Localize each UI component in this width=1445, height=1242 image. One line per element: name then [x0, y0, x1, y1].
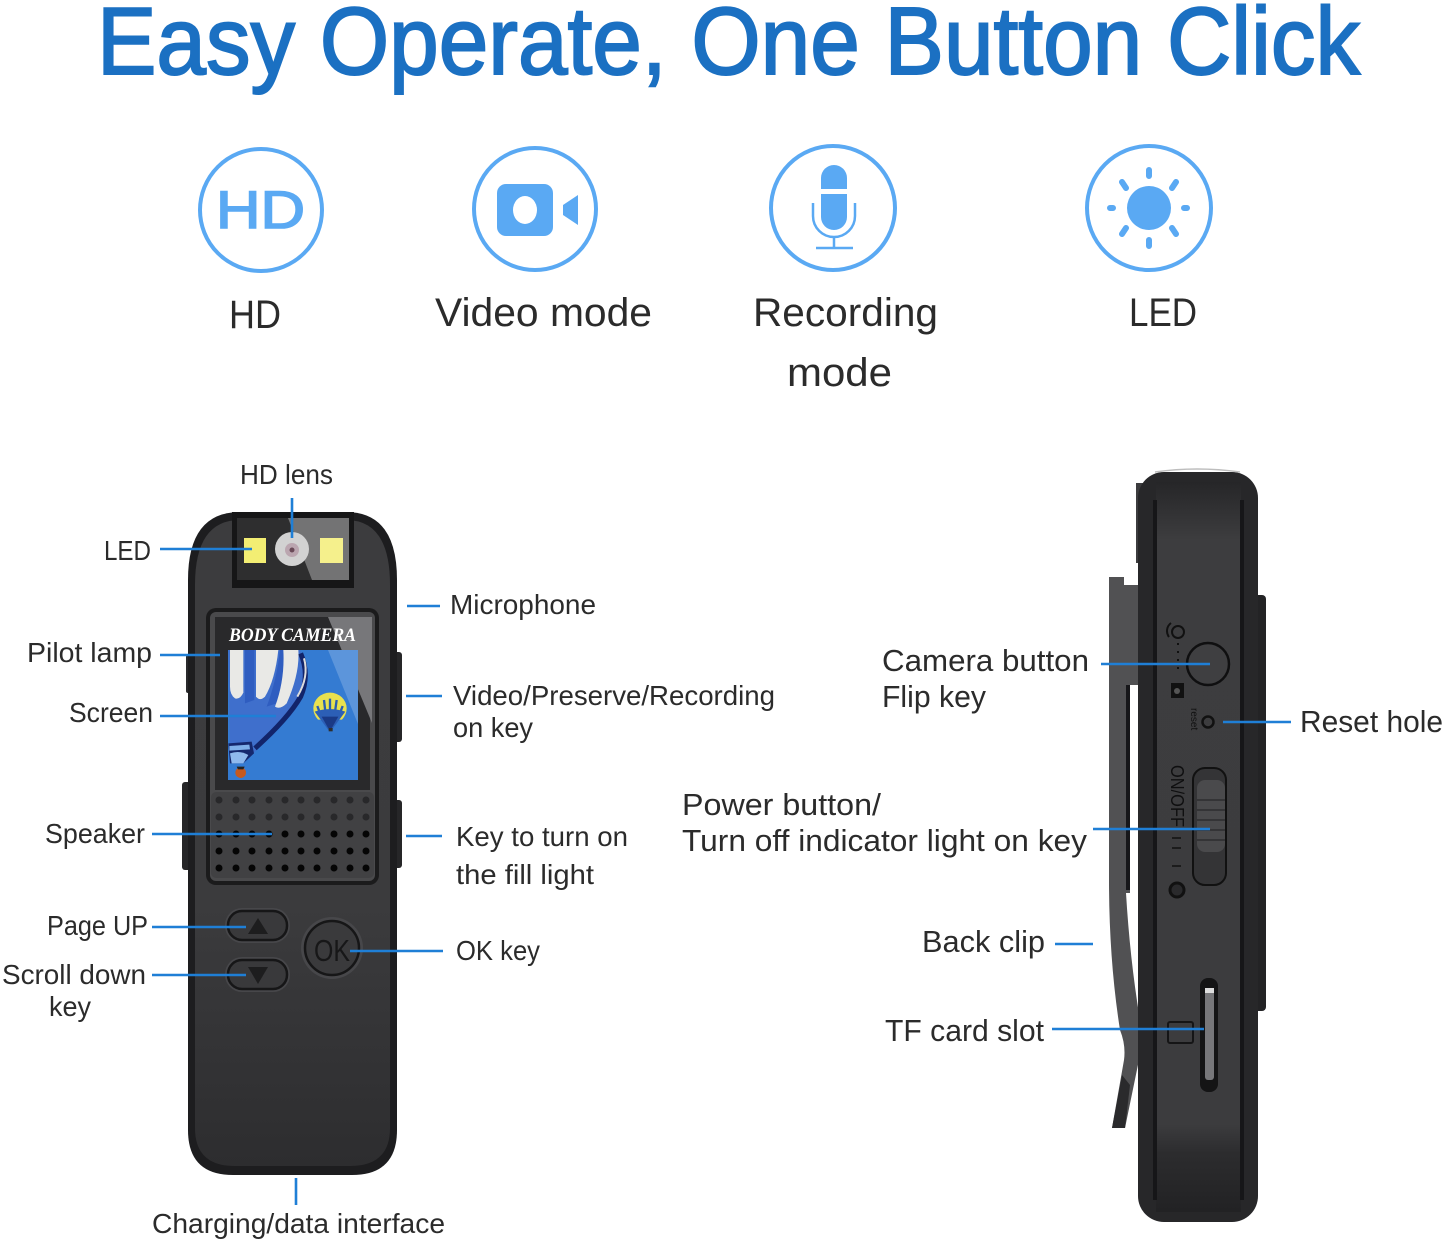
screen bezel: [206, 608, 379, 885]
label: LED: LED: [1129, 291, 1197, 335]
camera button: [1167, 623, 1229, 698]
icon: microphone: [771, 146, 895, 270]
callout: HD lens: [240, 459, 333, 538]
callout: LED: LED: [104, 535, 151, 566]
icon: video camera: [474, 148, 596, 270]
device body: [182, 512, 402, 1175]
side view of camera: [1109, 469, 1266, 1222]
label: recording mode: [753, 291, 938, 395]
label: HD: HD: [229, 293, 281, 337]
icon: sun: [1087, 146, 1211, 270]
label: recording mode: mode: [787, 351, 892, 395]
callout: fill light key: the fill light: [456, 859, 594, 890]
small balloon: [313, 693, 347, 731]
feature: video mode: [435, 148, 652, 335]
callout: scroll down: Scroll down: [2, 959, 146, 990]
callout: HD lens: HD lens: [240, 459, 333, 490]
back clip: [1109, 577, 1140, 1128]
OK button: OK: [314, 933, 350, 968]
callout: camera button: Flip key: [882, 679, 986, 714]
callout: power button: Power button/: [682, 787, 881, 822]
feature: LED: [1087, 146, 1211, 335]
icon: HD: [200, 149, 322, 271]
large balloon: [228, 650, 308, 778]
callout: camera button: [882, 643, 1210, 714]
callout: reset hole: Reset hole: [1300, 704, 1443, 739]
scroll down button: [225, 957, 290, 992]
callout: fill light key: [406, 821, 628, 890]
speaker grille: [211, 792, 374, 878]
callout: power button: [682, 787, 1210, 858]
rear side bar: [1250, 595, 1266, 1011]
label: video mode: Video mode: [435, 291, 652, 335]
side body: [1136, 469, 1258, 1222]
icon: HD: HD: [216, 181, 305, 240]
callout: charging interface: Charging/data interface: [152, 1208, 445, 1239]
reset hole: [1188, 708, 1214, 730]
callout: page up: Page UP: [47, 910, 148, 941]
reset hole: reset: [1188, 708, 1199, 730]
callout: microphone: Microphone: [450, 589, 596, 620]
callout: fill light key: Key to turn on: [456, 821, 628, 852]
callout: video key: Video/Preserve/Recording: [453, 680, 775, 711]
label: recording mode: Recording: [753, 291, 938, 335]
screen with hot air balloons: [228, 650, 358, 780]
feature: HD: [200, 149, 322, 337]
page up button: [225, 908, 290, 943]
callout: OK key: OK key: [456, 935, 540, 966]
OK button: [301, 917, 363, 979]
callout: TF card slot: TF card slot: [885, 1013, 1044, 1048]
lens module: [232, 512, 354, 588]
callout: scroll down: [2, 959, 246, 1022]
callout: scroll down: key: [49, 991, 91, 1022]
power slider: ON/OFF: [1167, 765, 1187, 827]
power slider: [1167, 765, 1226, 897]
feature: recording mode: [753, 146, 938, 395]
callout: back clip: Back clip: [922, 924, 1045, 959]
callout: video key: on key: [453, 712, 533, 743]
callout: camera button: Camera button: [882, 643, 1089, 678]
brand text: BODY CAMERA: [228, 625, 356, 646]
callout: power button: Turn off indicator light on key: [682, 823, 1088, 858]
front view of camera: [182, 512, 402, 1175]
callout: speaker: Speaker: [45, 818, 145, 849]
callout: pilot lamp: Pilot lamp: [27, 637, 152, 668]
TF card slot: [1168, 978, 1218, 1092]
callout: video key: [406, 680, 775, 743]
callout: screen: Screen: [69, 697, 153, 728]
